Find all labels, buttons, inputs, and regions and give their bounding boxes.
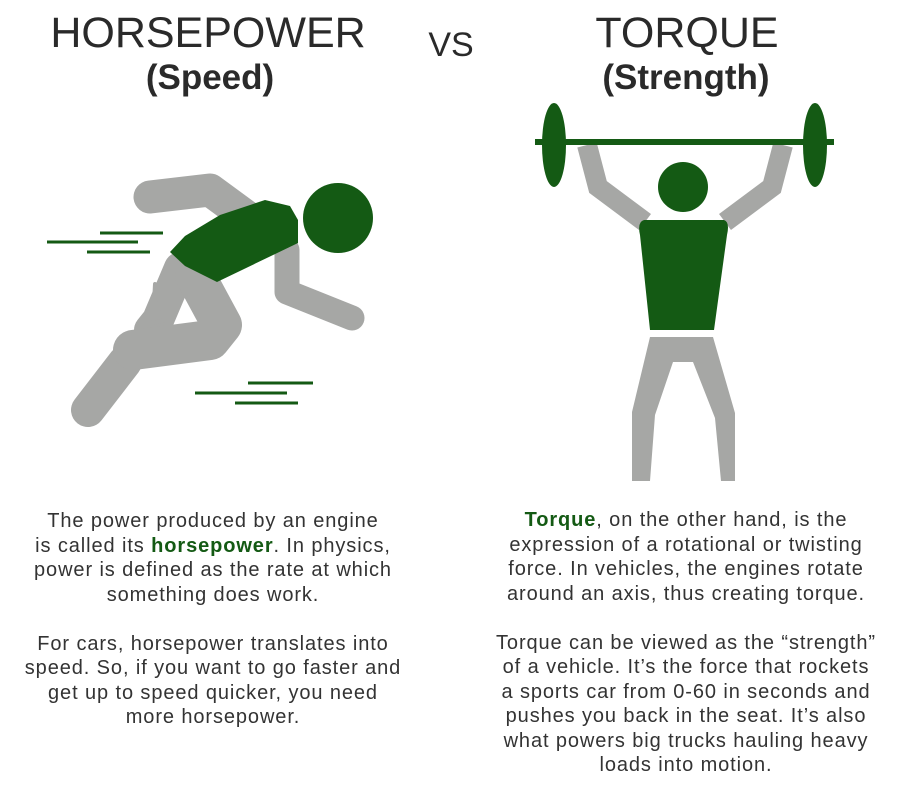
torso [639, 220, 728, 330]
text block: torque description: pushes you back in the seat. It’s also [506, 705, 866, 727]
icon: weightlifter [535, 103, 834, 481]
head [658, 162, 708, 212]
text block: horsepower description: speed. So, if you want to go faster and [25, 657, 401, 679]
text block: horsepower description: more horsepower. [126, 706, 300, 728]
legs [632, 337, 735, 481]
rear leg [88, 268, 180, 410]
text block: horsepower description: For cars, horsepower translates into [37, 632, 389, 654]
text block: horsepower description: The power produced by an engine [47, 510, 379, 532]
text block: torque description: Torque can be viewed as the “strength” [496, 632, 876, 654]
text block: torque description: Torque, on the other hand, is the [525, 509, 847, 531]
head [303, 183, 373, 253]
speed lines [47, 233, 313, 403]
text block: horsepower description: is called its horsepower. In physics, [35, 534, 391, 556]
text block: torque description: expression of a rotational or twisting [509, 534, 863, 556]
text block: horsepower description [25, 510, 401, 728]
torso [170, 200, 298, 282]
subtitle: strength: (Strength) [602, 58, 770, 97]
front leg [133, 275, 222, 350]
icon: sprinter [47, 174, 373, 427]
title: horsepower: HORSEPOWER [50, 9, 366, 57]
barbell [535, 139, 834, 145]
text block: torque description: loads into motion. [600, 754, 772, 776]
text block: horsepower description: something does work. [107, 584, 319, 606]
text block: torque description [496, 509, 876, 776]
title: torque: TORQUE [595, 9, 779, 57]
text block: horsepower description: power is defined as the rate at which [34, 559, 392, 581]
front arm [287, 250, 352, 318]
text block: torque description: force. In vehicles, the engines rotate [508, 558, 864, 580]
text block: torque description: what powers big trucks hauling heavy [504, 730, 868, 752]
text block: horsepower description: get up to speed quicker, you need [48, 682, 378, 704]
vs label: VS [428, 26, 474, 64]
text block: torque description: of a vehicle. It’s the force that rockets [503, 656, 869, 678]
text block: torque description: around an axis, thus creating torque. [507, 582, 865, 604]
rear arm [150, 190, 262, 228]
subtitle: speed: (Speed) [146, 58, 274, 97]
text block: torque description: a sports car from 0-60 in seconds and [501, 680, 871, 702]
arms [587, 145, 783, 222]
